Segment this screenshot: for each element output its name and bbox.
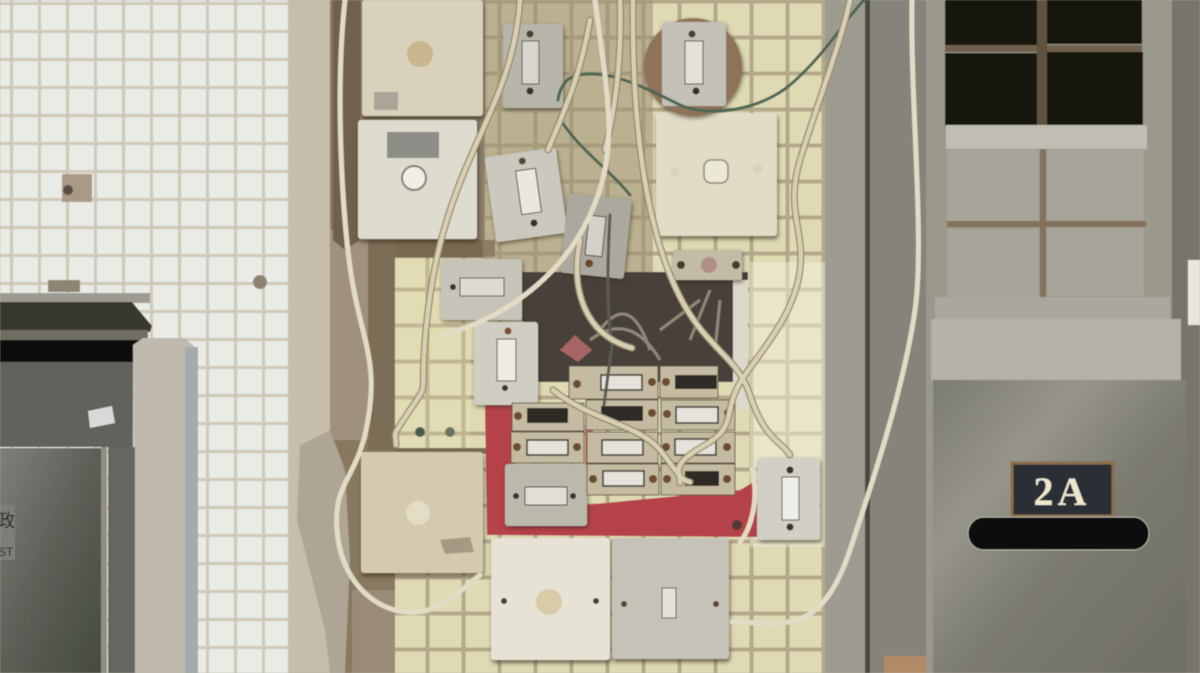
switch a: [503, 24, 563, 108]
window dark panes: [945, 0, 1143, 126]
switch d: [560, 193, 632, 279]
switch b: [662, 22, 726, 106]
small toggle switches: [441, 18, 820, 540]
window ledge: [935, 297, 1170, 321]
mail slot: [968, 517, 1149, 550]
partial sign text: [0, 505, 15, 560]
plate 3: [656, 113, 777, 236]
rust backing disc: [644, 18, 742, 116]
red back panel: [485, 405, 757, 537]
switch e: [441, 259, 522, 320]
switch h: [505, 464, 587, 526]
concrete pillar and broken plaster: [288, 0, 395, 673]
plate 1: [362, 0, 483, 116]
mail slot door: [933, 380, 1186, 673]
plate 5: [491, 538, 610, 660]
cable highlights: [395, 0, 850, 483]
left white tiled wall: [0, 0, 296, 673]
number plate: 2A: [1034, 469, 1090, 514]
thin dark wires: [604, 215, 612, 405]
loose cables: [337, 0, 918, 623]
plate 6: [612, 538, 729, 659]
window lower panes: [947, 150, 1144, 297]
switch c: [484, 147, 568, 242]
green wire: [558, 0, 864, 195]
doorbell button bank: [511, 366, 735, 495]
wiring cavity: [522, 272, 748, 410]
door panel: [931, 319, 1181, 381]
cable outlines: [395, 0, 850, 483]
plate 2: [358, 120, 477, 239]
left metal mailbox: [0, 293, 198, 673]
number plate: [1012, 463, 1113, 516]
switch f: [474, 322, 538, 405]
plate 4: [361, 452, 483, 573]
strip switch: [673, 250, 742, 280]
right post: [825, 0, 934, 673]
right door with window: [926, 0, 1200, 673]
long pale cables: [337, 0, 918, 623]
sticker remnant: [88, 406, 115, 428]
switch g: [758, 458, 820, 540]
window frame bar: [946, 125, 1147, 149]
yellow tiled wall: [395, 0, 827, 673]
switch plates, large: [358, 0, 777, 660]
